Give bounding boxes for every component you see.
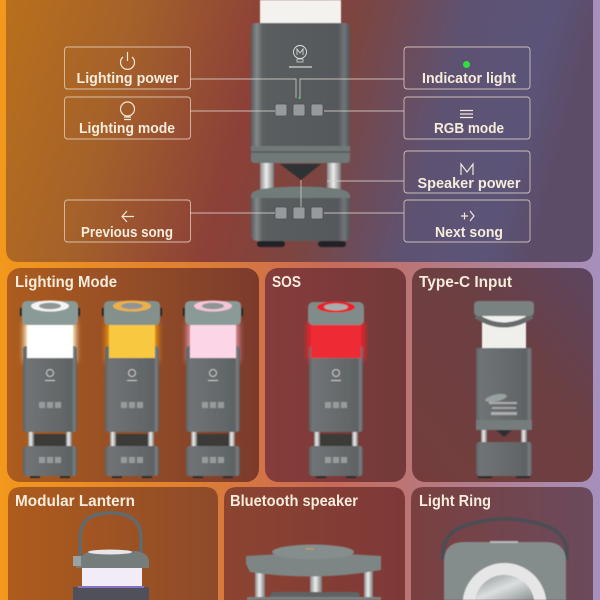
heading: Lighting Mode [15,274,117,291]
panel: light ring [411,487,593,600]
lantern: back view [474,301,534,478]
panel: modular lantern [8,487,218,600]
heading: Modular Lantern [15,493,135,510]
callout: next song [404,200,530,242]
callout: lighting mode [64,97,190,139]
callout: next song: Next song [435,225,503,241]
callout: previous song: Previous song [81,225,173,241]
icon: M [461,164,473,175]
callout: lighting mode: Lighting mode [79,121,175,137]
heading: Light Ring [419,493,491,510]
callout: RGB mode: RGB mode [434,121,504,137]
lantern: white [20,300,80,478]
icon: power [121,52,134,69]
heading: SOS [272,274,301,291]
lantern: pink [183,300,243,478]
heading: Bluetooth speaker [230,493,358,510]
panel: hero controls [6,0,593,262]
icon: three lines [460,110,473,118]
heading: Type-C Input [419,274,512,291]
icon: left arrow [122,211,134,222]
callout: lighting power [64,47,190,89]
callout: speaker power: Speaker power [418,176,521,192]
callout: previous song [64,200,190,242]
lantern top view [443,519,567,600]
lantern: with handle [73,513,149,600]
icon: next arrow [461,211,474,221]
panel: Type-C input [412,268,593,482]
upper buttons [275,104,323,116]
icon: brand logo [289,46,312,68]
lower buttons [275,207,323,219]
callout: lighting power: Lighting power [76,71,179,87]
callout: RGB mode [404,97,530,139]
lantern: amber [102,300,162,478]
indicator dot on body [298,97,300,99]
panel: bluetooth speaker [224,487,405,600]
icon: bulb [120,102,134,120]
callout: indicator light [404,47,530,89]
speaker [246,544,381,600]
connector lines [190,79,404,213]
icon: green dot [463,61,470,68]
lantern: red [307,302,365,478]
panel: lighting mode [7,268,259,482]
panel: SOS [265,268,406,482]
hero lantern [251,0,350,247]
callout: indicator light: Indicator light [422,71,516,87]
callout: speaker power [404,151,530,193]
